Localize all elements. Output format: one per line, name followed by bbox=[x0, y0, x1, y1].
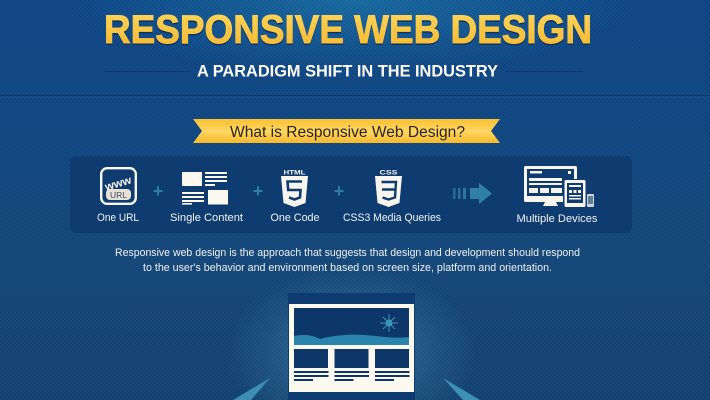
plus: + bbox=[253, 181, 263, 201]
plus: + bbox=[334, 181, 344, 201]
title: RESPONSIVE WEB DESIGN bbox=[104, 10, 592, 54]
labels: One Code bbox=[270, 212, 320, 224]
arrow bbox=[453, 183, 492, 204]
content columns bbox=[294, 349, 410, 381]
right ray bbox=[443, 378, 480, 400]
icon: single content bbox=[182, 172, 228, 205]
ribbon heading: What is Responsive Web Design? bbox=[230, 124, 465, 141]
icon: one URL: www bbox=[103, 174, 133, 194]
hero image bbox=[294, 308, 409, 345]
website layout illustration bbox=[288, 293, 415, 400]
labels bbox=[97, 212, 598, 225]
icon: one URL: URL bbox=[110, 190, 127, 200]
icon: CSS3 shield bbox=[375, 170, 402, 207]
plus: + bbox=[153, 181, 163, 201]
icon: multiple devices bbox=[524, 166, 594, 208]
subtitle with rule: A PARADIGM SHIFT IN THE INDUSTRY bbox=[197, 62, 499, 80]
labels: Multiple Devices bbox=[516, 213, 598, 225]
labels: CSS3 Media Queries bbox=[343, 212, 441, 224]
description text: to the user's behavior and environment based on screen size, platform and orientation. bbox=[143, 262, 552, 274]
icon: CSS3 shield: CSS bbox=[380, 170, 398, 176]
description text: Responsive web design is the approach that suggests that design and development should respond bbox=[115, 247, 580, 259]
labels: One URL bbox=[97, 212, 139, 224]
left ray bbox=[233, 378, 270, 400]
title: RESPONSIVE WEB DESIGN bbox=[104, 8, 592, 52]
ribbon heading bbox=[193, 119, 500, 143]
icon: HTML5 shield: HTML bbox=[284, 170, 306, 176]
icon: one URL bbox=[101, 168, 136, 204]
icon: HTML5 shield bbox=[281, 170, 308, 207]
labels: Single Content bbox=[170, 212, 244, 224]
description text bbox=[115, 247, 580, 274]
panel: equation bbox=[70, 156, 632, 233]
